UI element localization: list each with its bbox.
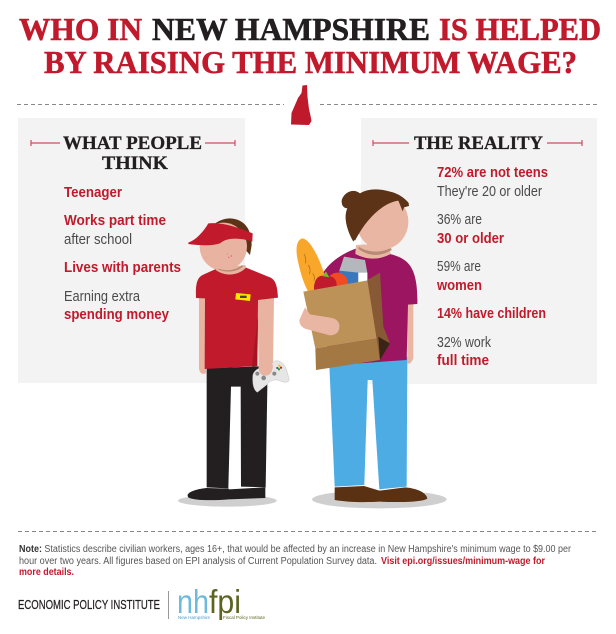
logo: nhfpi: New Hampshire [178, 615, 210, 620]
title [19, 11, 601, 80]
title: NEW HAMPSHIRE [152, 11, 430, 47]
note text: Visit epi.org/issues/minimum-wage for [381, 556, 545, 567]
list: facts: 36% are [437, 212, 482, 228]
logo: nhfpi [177, 583, 265, 620]
list: facts: women [436, 278, 482, 294]
heading: the reality: THE REALITY [414, 133, 543, 154]
list: facts: 30 or older [437, 231, 504, 247]
list: facts: 32% work [437, 335, 492, 351]
list: facts: 14% have children [437, 306, 546, 322]
panel: what people think [18, 118, 245, 383]
logo: nhfpi: nh [177, 583, 209, 620]
icon: baguette [297, 238, 326, 295]
list: perceptions: spending money [64, 307, 169, 323]
list: facts: 72% are not teens [437, 165, 548, 181]
logo: nhfpi: fpi [209, 583, 241, 620]
note text: more details. [19, 567, 74, 578]
note text [19, 544, 572, 578]
illustration: working woman with groceries [297, 189, 447, 508]
panel: the reality [361, 118, 597, 384]
arm holding bag [299, 307, 339, 335]
list: facts [436, 165, 548, 369]
list: perceptions [64, 185, 181, 323]
heading: the reality [373, 133, 582, 154]
note text: hour over two years. All figures based on EPI analysis of Current Population Survey data. [19, 556, 377, 567]
list: perceptions: Lives with parents [64, 260, 181, 276]
icon: New Hampshire state [291, 85, 312, 125]
list: perceptions: after school [64, 232, 132, 248]
heading: what people think [31, 133, 235, 174]
title: IS HELPED [439, 11, 601, 47]
icon: milk carton [339, 257, 367, 284]
title: WHO IN [19, 11, 142, 47]
list: facts: They're 20 or older [437, 184, 542, 200]
title: BY RAISING THE MINIMUM WAGE? [44, 44, 577, 80]
heading: what people think: WHAT PEOPLE [63, 133, 202, 154]
heading: what people think: THINK [102, 153, 168, 174]
list: facts: 59% are [437, 259, 481, 275]
icon: game controller [253, 361, 289, 392]
list: facts: full time [437, 353, 489, 369]
logo: Economic Policy Institute: ECONOMIC POLICY INSTITUTE [18, 597, 160, 612]
icon: fruit [314, 271, 348, 294]
list: perceptions: Teenager [64, 185, 122, 201]
icon: grocery bag [303, 273, 390, 370]
list: perceptions: Earning extra [64, 289, 141, 305]
note text: Note: Statistics describe civilian workers, ages 16+, that would be affected by an increase in New Hampshire's minimum wage to $9.00 per [19, 544, 572, 555]
illustration: teenager [178, 218, 289, 507]
logo: nhfpi: Fiscal Policy Institute [223, 615, 265, 620]
list: perceptions: Works part time [64, 213, 166, 229]
